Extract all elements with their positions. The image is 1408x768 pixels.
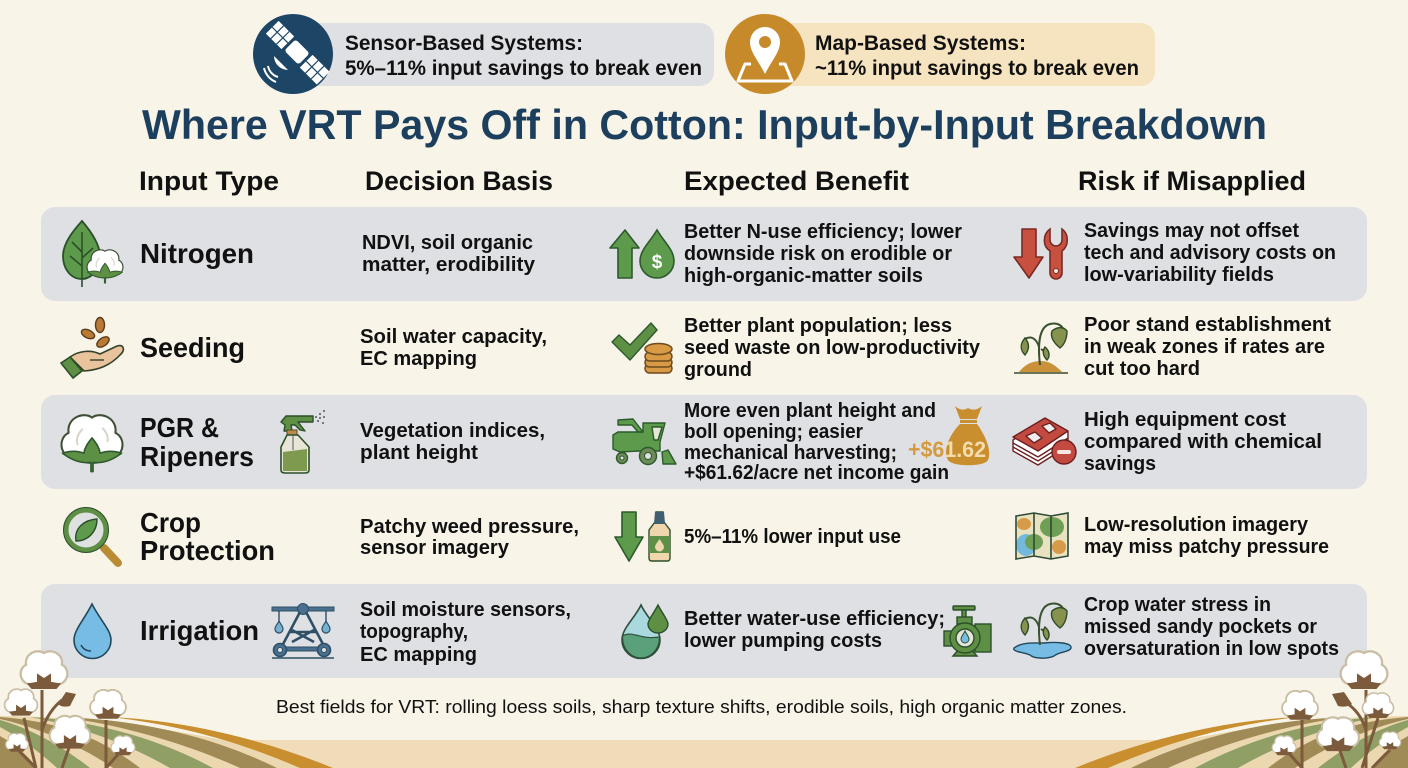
risk: seeding: in weak zones if rates are [1084,335,1325,358]
expected benefit: irrigation: lower pumping costs [684,629,882,652]
decision basis: nitrogen: matter, erodibility [362,253,536,276]
column headers: Expected Benefit [684,166,909,196]
callout text: 5%–11% input savings to break even [345,57,702,80]
icon: money bag with gain: +$61.62 [908,437,986,462]
label: crop protection: Protection [140,535,275,566]
column headers: Input Type [139,166,279,196]
icon: cotton boll [61,415,123,472]
icon: money bag with gain [908,406,989,465]
expected benefit: nitrogen: Better N-use efficiency; lower [684,220,962,243]
expected benefit: seeding: seed waste on low-productivity [684,336,981,359]
label: crop protection: Crop [140,507,201,538]
expected benefit: seeding: ground [684,358,752,381]
decision basis: crop protection: Patchy weed pressure, [360,515,579,538]
panel: seeding row [61,313,1331,381]
icon: leaf and cotton [63,221,123,287]
risk: seeding: Poor stand establishment [1084,313,1331,336]
risk: PGR: savings [1084,452,1156,475]
label: PGR and ripeners: PGR & [140,412,219,443]
callout text: ~11% input savings to break even [815,57,1139,80]
icon: water drop [74,604,111,659]
icon: patchy field map [1016,513,1068,559]
decision basis: irrigation [360,598,571,666]
risk: seeding [1084,313,1331,380]
decision basis: seeding [360,325,547,370]
panel: PGR and ripeners row [41,395,1367,489]
expected benefit: PGR: mechanical harvesting; [684,441,897,464]
risk: crop protection: Low-resolution imagery [1084,513,1309,536]
decision basis: irrigation: EC mapping [360,643,477,666]
decision basis: PGR [360,419,545,464]
icon: spray bottle [281,410,325,473]
risk: PGR: High equipment cost [1084,408,1286,431]
label: crop protection [140,507,275,566]
expected benefit: seeding: Better plant population; less [684,314,952,337]
decision basis: irrigation: Soil moisture sensors, [360,598,571,621]
callout text [815,32,1139,80]
icon: harvester [613,419,676,464]
expected benefit: seeding [684,314,981,381]
callout: map-based systems [725,14,1155,94]
panel: crop protection row [64,507,1329,566]
title: Where VRT Pays Off in Cotton: Input-by-Input Breakdown [142,101,1267,148]
expected benefit: nitrogen: high-organic-matter soils [684,264,923,287]
decision basis: crop protection: sensor imagery [360,536,510,559]
risk: nitrogen: low-variability fields [1084,263,1274,286]
label: irrigation: Irrigation [140,615,259,646]
expected benefit: irrigation: Better water-use efficiency; [684,607,945,630]
cotton plants left [5,651,135,768]
cotton plants right [1272,651,1401,768]
risk: nitrogen [1084,219,1336,286]
callout text: Map-Based Systems: [815,32,1026,55]
risk: PGR: compared with chemical [1084,430,1322,453]
icon: magnifier with leaf [64,508,118,563]
icon: water level drops [622,605,668,659]
icon: wilted seedling on soil [1014,323,1068,373]
callout text [345,32,702,80]
risk: nitrogen: Savings may not offset [1084,219,1299,242]
label: PGR and ripeners: Ripeners [140,441,254,472]
column headers [139,166,1306,196]
expected benefit: nitrogen: downside risk on erodible or [684,242,952,265]
decision basis: irrigation: topography, [360,620,468,643]
label: nitrogen: Nitrogen [140,238,254,269]
decision basis: PGR: Vegetation indices, [360,419,545,442]
risk: crop protection [1084,513,1329,558]
label: PGR and ripeners [140,412,254,472]
column headers: Decision Basis [365,166,553,196]
decision basis: seeding: EC mapping [360,347,477,370]
icon: water pump [944,606,991,656]
expected benefit: crop protection: 5%–11% lower input use [684,525,901,548]
column headers: Risk if Misapplied [1078,166,1306,196]
expected benefit: irrigation [684,607,945,652]
icon: center pivot [272,604,334,658]
field landscape band [0,716,1408,768]
icon: arrow up and dollar drop: $ [652,252,663,273]
icon: satellite [253,14,333,94]
icon: cash stack with minus [1013,418,1076,465]
decision basis: crop protection [360,515,579,559]
expected benefit: PGR: More even plant height and [684,399,936,422]
risk: irrigation [1084,593,1339,660]
label: seeding: Seeding [140,332,245,363]
expected benefit: PGR: +$61.62/acre net income gain [684,461,949,484]
panel: irrigation row [41,584,1367,678]
risk: nitrogen: tech and advisory costs on [1084,241,1336,264]
risk: irrigation: missed sandy pockets or [1084,615,1317,638]
icon: red arrow and wrench [1014,229,1067,279]
decision basis: nitrogen [362,231,536,276]
expected benefit: PGR [684,399,949,484]
icon: map pin [725,14,805,94]
footer note: Best fields for VRT: rolling loess soils, sharp texture shifts, erodible soils, high organic matter zones. [276,697,1127,717]
decision basis: PGR: plant height [360,441,478,464]
icon: arrow down and bottle [615,512,670,561]
risk: irrigation: Crop water stress in [1084,593,1271,616]
icon: check and coins [612,323,672,373]
panel: nitrogen row [41,207,1367,301]
risk: seeding: cut too hard [1084,357,1200,380]
icon: arrow up and dollar drop [610,230,674,278]
decision basis: nitrogen: NDVI, soil organic [362,231,533,254]
expected benefit: nitrogen [684,220,962,287]
callout: sensor-based systems [253,14,714,94]
expected benefit: PGR: boll opening; easier [684,420,863,443]
risk: crop protection: may miss patchy pressure [1084,535,1329,558]
icon: wilted plant in puddle [1014,603,1071,658]
decision basis: seeding: Soil water capacity, [360,325,547,348]
icon: hand with seeds [61,318,123,378]
callout text: Sensor-Based Systems: [345,32,583,55]
risk: PGR [1084,408,1322,475]
risk: irrigation: oversaturation in low spots [1084,637,1339,660]
